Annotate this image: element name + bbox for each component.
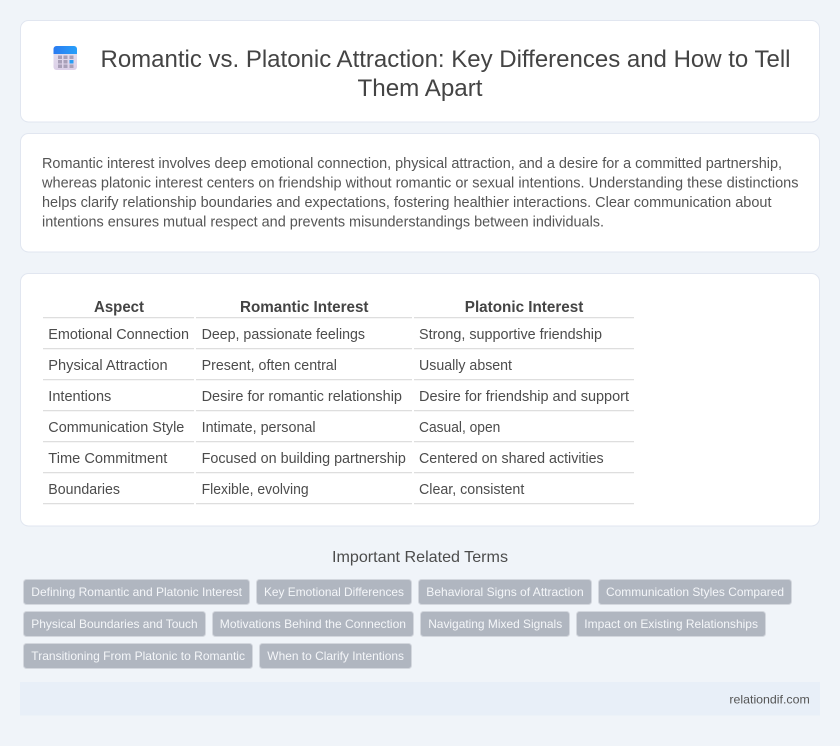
tag list: related terms: Communication Styles Compared <box>606 585 784 599</box>
text block: introduction: whereas platonic interest centers on friendship without romantic or sexual intentions. Understanding these distinctions <box>41 176 798 192</box>
table row: boundaries: Flexible, evolving <box>202 482 309 498</box>
tag list: related terms: When to Clarify Intentions <box>267 649 404 663</box>
title: Romantic vs. Platonic Attraction: Key Differences and How to Tell <box>100 46 790 73</box>
panel: header <box>20 20 820 122</box>
table row: time commitment: Time Commitment <box>48 451 167 467</box>
tag list: related terms: Defining Romantic and Platonic Interest <box>31 585 243 599</box>
table row: emotional connection: Strong, supportive friendship <box>419 327 602 343</box>
text block: introduction: Romantic interest involves deep emotional connection, physical attraction, and a desire for a committed partnership, <box>42 156 782 172</box>
tag list: related terms: Physical Boundaries and Touch <box>31 617 198 631</box>
tag list: related terms: Motivations Behind the Connection <box>220 617 406 631</box>
table row: physical attraction: Physical Attraction <box>48 358 168 374</box>
footer source text: relationdif.com <box>729 692 810 706</box>
table row: boundaries: Clear, consistent <box>419 482 524 498</box>
table row: communication style: Intimate, personal <box>202 420 316 436</box>
table row: emotional connection: Deep, passionate feelings <box>202 327 365 343</box>
tag list: related terms: Key Emotional Differences <box>264 585 404 599</box>
icon: calendar <box>54 46 77 70</box>
heading: related terms: Important Related Terms <box>332 549 508 566</box>
table header row: Romantic Interest <box>240 299 369 316</box>
tag list: related terms: Behavioral Signs of Attraction <box>426 585 584 599</box>
table row: communication style: Casual, open <box>419 420 500 436</box>
table row: communication style: Communication Style <box>48 420 184 436</box>
table row: boundaries: Boundaries <box>48 482 120 498</box>
title: Them Apart <box>358 75 483 102</box>
table header row: Platonic Interest <box>465 299 584 316</box>
table row: physical attraction: Usually absent <box>419 358 512 374</box>
table header row <box>94 299 584 316</box>
table row: intentions: Intentions <box>48 389 111 405</box>
table row: communication style <box>48 420 500 436</box>
table row: physical attraction: Present, often central <box>202 358 337 374</box>
footer bar <box>20 682 820 716</box>
text block: introduction: helps clarify relationship boundaries and expectations, fostering healthier interactions. Clear communication about <box>42 195 772 211</box>
table row: intentions: Desire for romantic relationship <box>202 389 402 405</box>
table row: intentions <box>48 389 629 405</box>
panel: comparison table <box>20 274 820 526</box>
table row: time commitment <box>48 451 604 467</box>
tag list: related terms: Transitioning From Platonic to Romantic <box>31 649 245 663</box>
tag list: related terms <box>24 580 792 668</box>
table row: boundaries <box>48 482 524 498</box>
text block: introduction: intentions ensures mutual respect and prevents misunderstandings between individuals. <box>42 214 604 230</box>
table row: emotional connection <box>48 327 602 343</box>
tag list: related terms: Impact on Existing Relationships <box>584 617 758 631</box>
panel: introduction <box>20 134 820 252</box>
table row: time commitment: Centered on shared activities <box>419 451 604 467</box>
table header row: Aspect <box>94 299 145 316</box>
tag list: related terms: Navigating Mixed Signals <box>428 617 562 631</box>
table row: emotional connection: Emotional Connection <box>48 327 189 343</box>
table row: time commitment: Focused on building partnership <box>202 451 406 467</box>
table row: intentions: Desire for friendship and support <box>419 389 629 405</box>
table row: physical attraction <box>48 358 512 374</box>
